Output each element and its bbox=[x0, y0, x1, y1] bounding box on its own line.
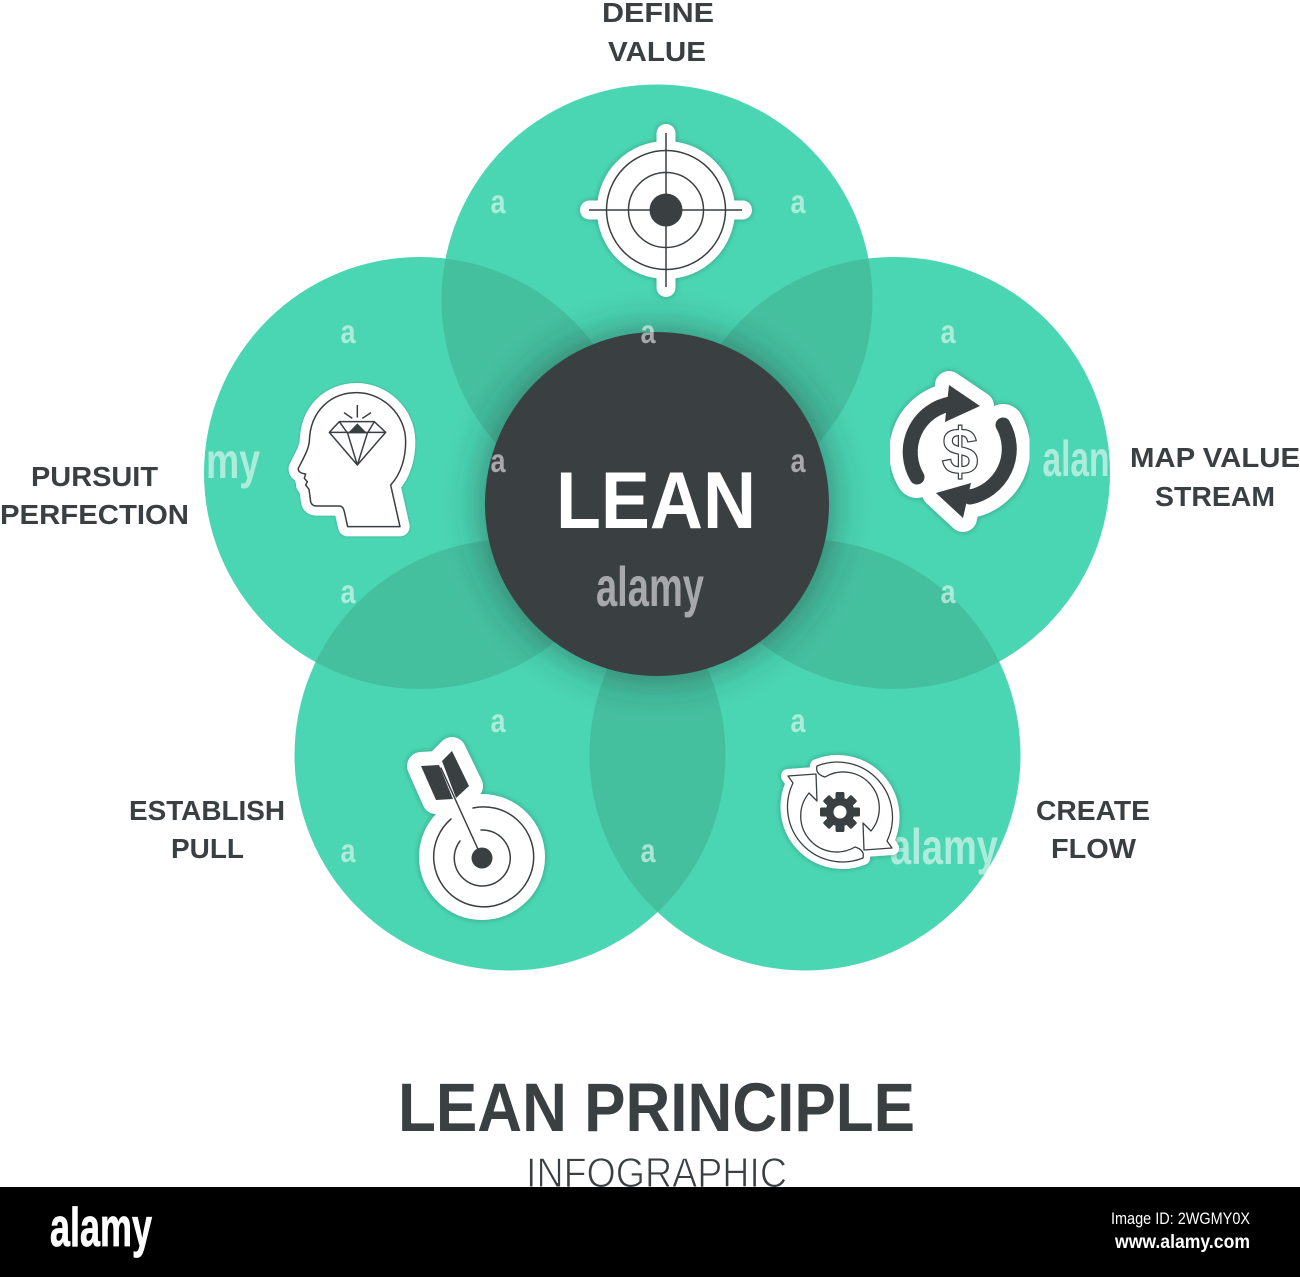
label: pursuit perfection: PURSUIT bbox=[31, 461, 158, 492]
watermarks: alan bbox=[1042, 431, 1110, 487]
watermarks: a bbox=[490, 183, 506, 220]
label: create flow: CREATE bbox=[1036, 795, 1150, 826]
watermarks: a bbox=[940, 573, 956, 610]
label: pursuit perfection: PERFECTION bbox=[0, 499, 189, 530]
label: establish pull bbox=[129, 795, 285, 864]
label: map value stream: MAP VALUE bbox=[1130, 442, 1300, 473]
icon: head with diamond bbox=[298, 393, 406, 527]
center circle bbox=[485, 332, 829, 676]
watermarks: a bbox=[340, 313, 356, 350]
center shadow bbox=[481, 328, 833, 680]
label: establish pull: ESTABLISH bbox=[129, 795, 285, 826]
subtitle: INFOGRAPHIC bbox=[526, 1149, 787, 1196]
petal circles bbox=[204, 84, 1110, 970]
icon: gear cycle bbox=[788, 760, 892, 864]
footer bar bbox=[0, 1187, 1300, 1277]
watermarks: a bbox=[790, 183, 806, 220]
icon: dollar cycle: $ bbox=[942, 414, 978, 488]
watermarks: a bbox=[940, 313, 956, 350]
watermarks: a bbox=[490, 442, 506, 479]
watermarks: a bbox=[340, 573, 356, 610]
watermarks: my bbox=[206, 433, 260, 489]
watermarks: a bbox=[640, 313, 656, 350]
watermarks bbox=[206, 183, 1110, 875]
watermarks: alamy bbox=[890, 819, 998, 875]
watermarks: alamy bbox=[596, 555, 704, 618]
watermarks: a bbox=[340, 832, 356, 869]
label: define value: VALUE bbox=[608, 36, 706, 67]
footer image id: Image ID: 2WGMY0X bbox=[1111, 1209, 1250, 1228]
watermarks: a bbox=[790, 702, 806, 739]
watermarks: a bbox=[490, 702, 506, 739]
label: map value stream: STREAM bbox=[1155, 481, 1275, 512]
icon: arrow in bullseye bbox=[419, 751, 545, 920]
label: create flow: FLOW bbox=[1051, 833, 1137, 864]
title: LEAN PRINCIPLE bbox=[398, 1069, 915, 1146]
watermarks: a bbox=[790, 442, 806, 479]
label: map value stream bbox=[1130, 442, 1300, 512]
label: create flow bbox=[1036, 795, 1150, 864]
label: establish pull: PULL bbox=[171, 833, 244, 864]
center label: LEAN bbox=[556, 456, 756, 546]
icon: dollar cycle bbox=[910, 385, 1009, 518]
label: define value bbox=[602, 0, 714, 67]
icon: crosshair target bbox=[580, 124, 752, 297]
label: pursuit perfection bbox=[0, 461, 189, 530]
watermarks: a bbox=[640, 832, 656, 869]
footer logo: alamy bbox=[50, 1196, 152, 1258]
footer url: www.alamy.com bbox=[1114, 1232, 1250, 1253]
